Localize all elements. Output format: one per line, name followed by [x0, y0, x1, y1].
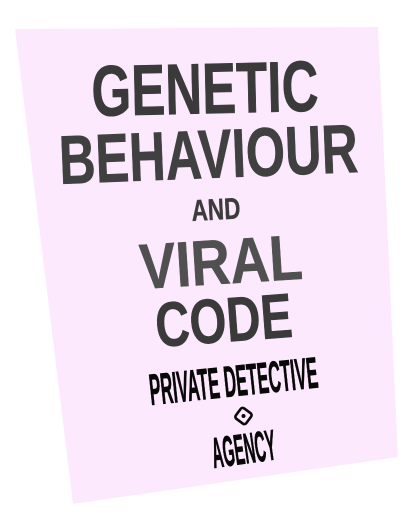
title: GENETIC: GENETIC: [91, 47, 319, 132]
title: VIRAL: VIRAL: [137, 221, 305, 303]
title: AND: AND: [191, 192, 241, 228]
panel: tilted pink cover: AGENCY: [209, 421, 279, 478]
title: CODE: CODE: [153, 281, 295, 361]
icon: diamond ornament: [233, 406, 254, 426]
